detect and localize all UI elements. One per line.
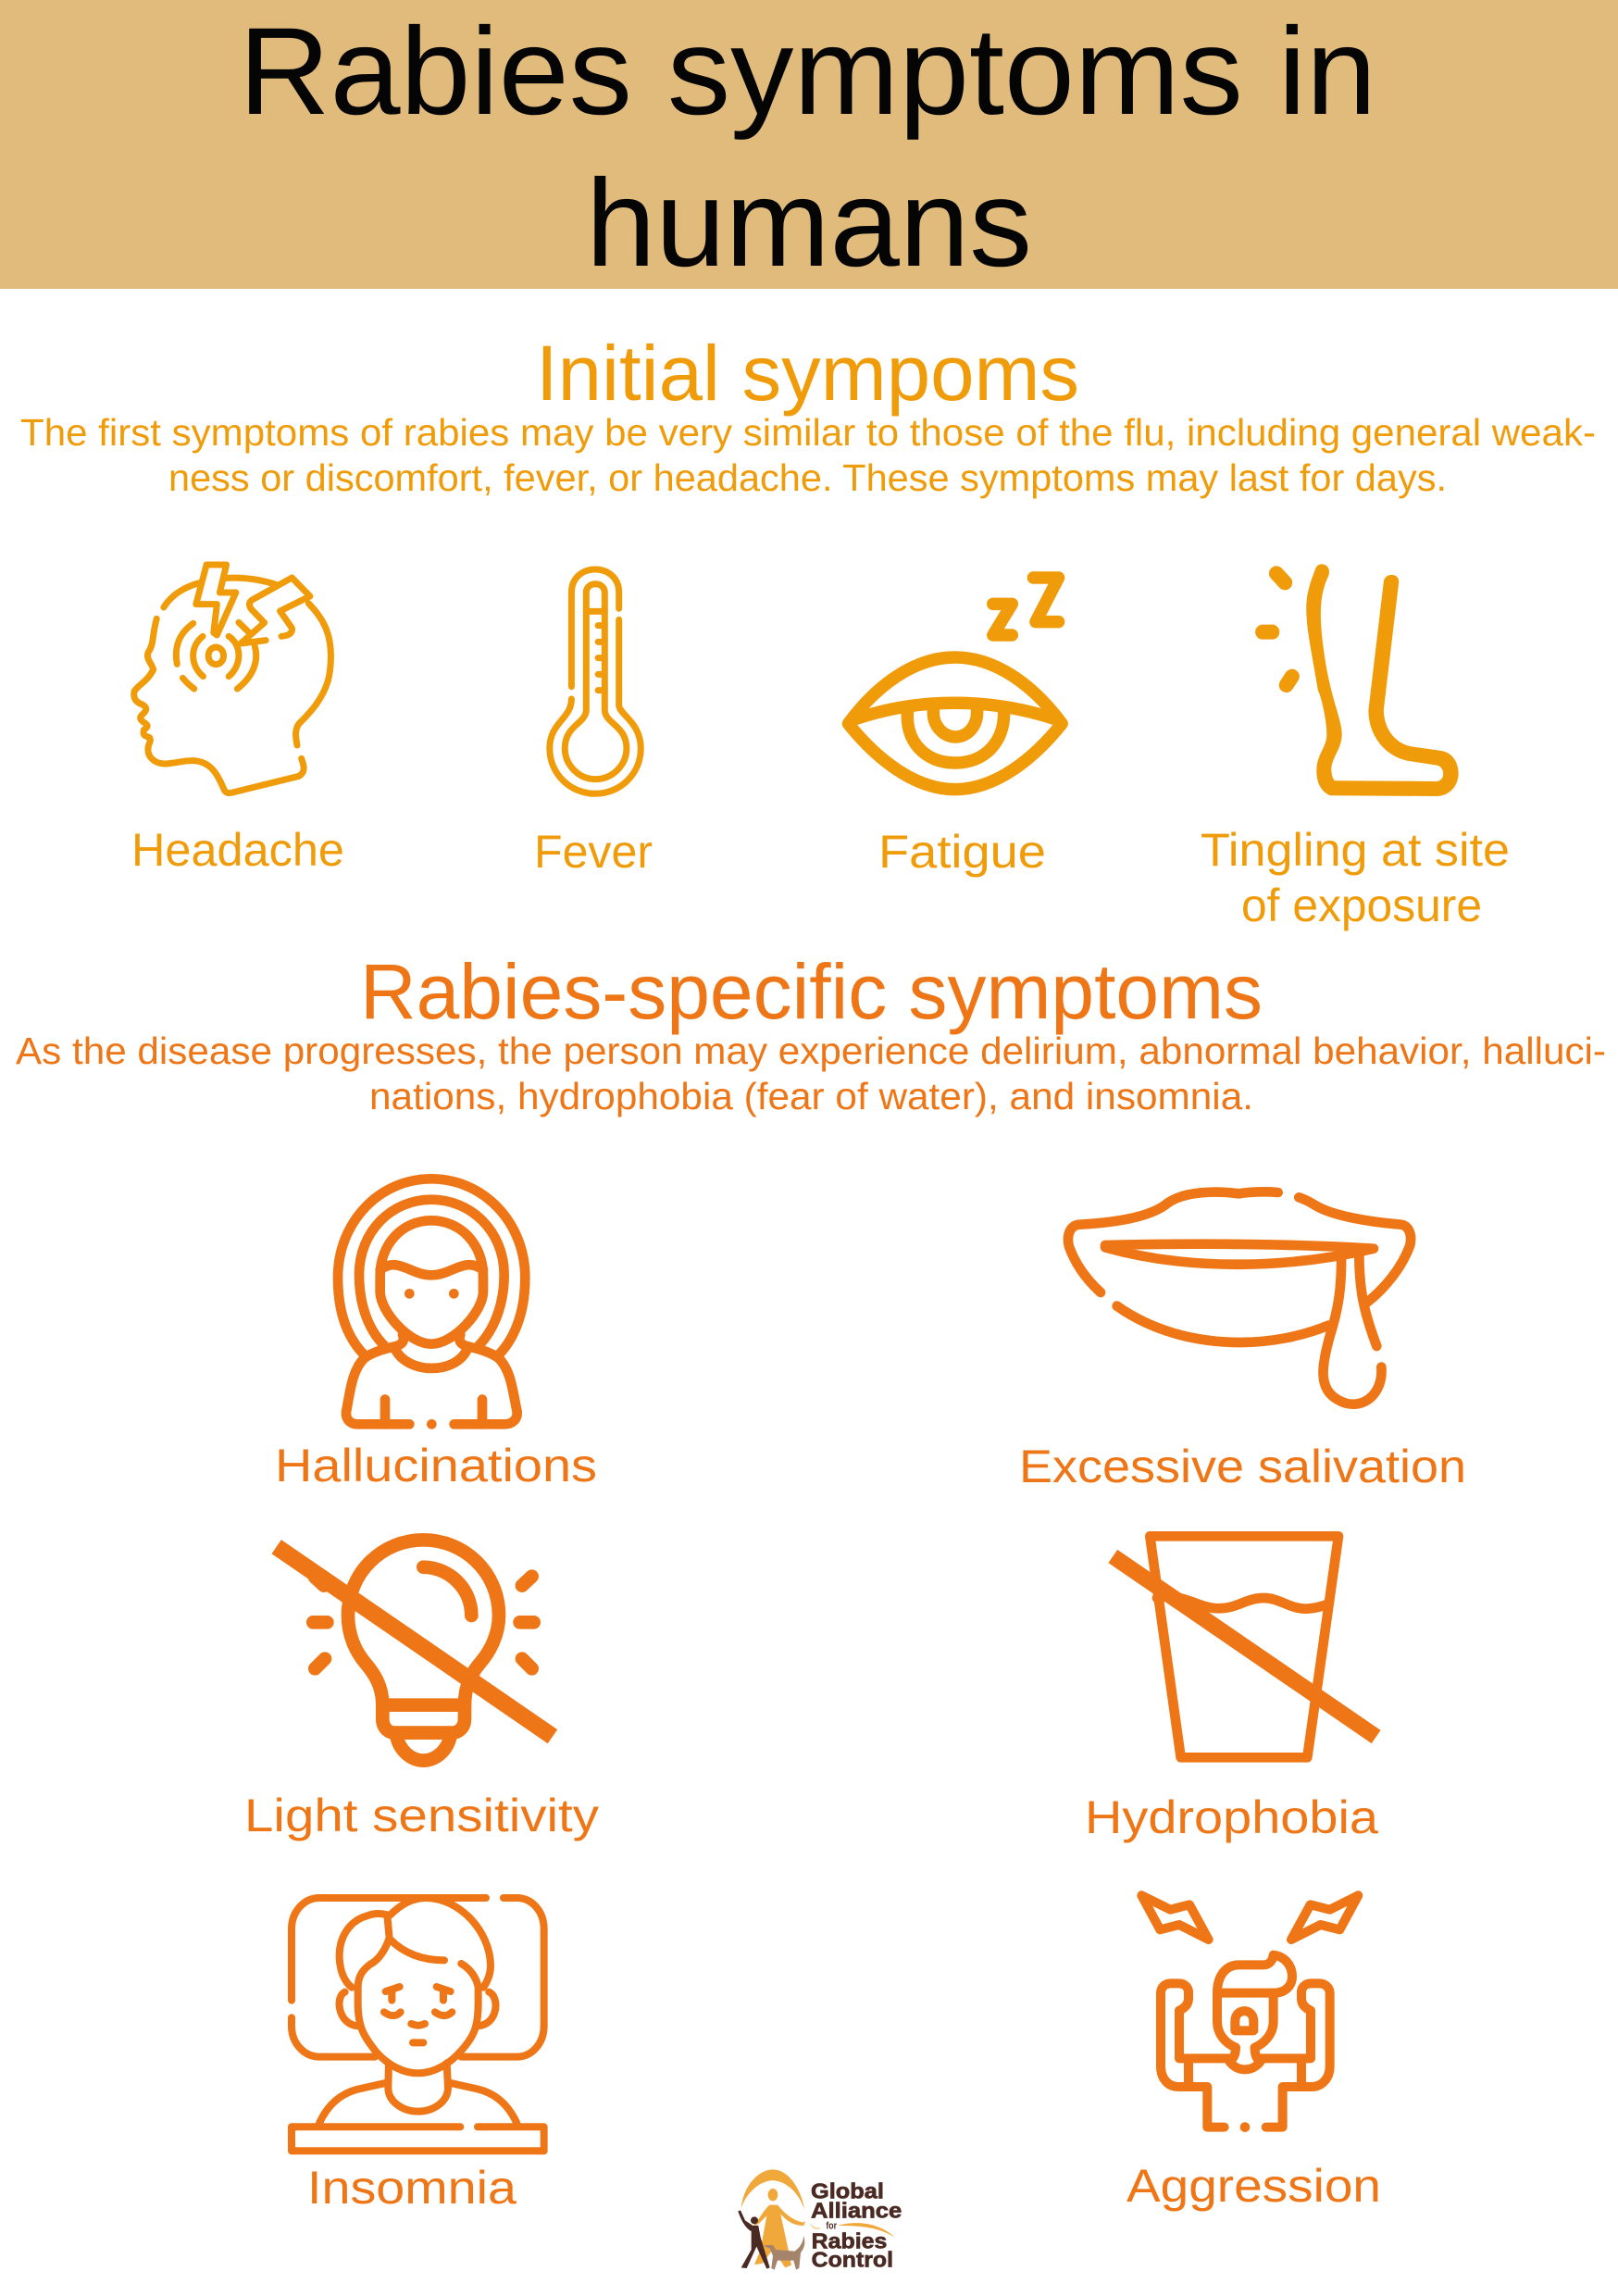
label: excessive salivation: Excessive salivation [1019,1441,1466,1492]
logo: Global Alliance for Rabies Control: for [826,2221,837,2232]
icon: excessive salivation [1068,1192,1411,1404]
label: hydrophobia: Hydrophobia [1085,1791,1378,1843]
icon: insomnia [292,1898,544,2151]
label: tingling at site of exposure [1201,824,1510,931]
text block: initial symptoms description: ness or discomfort, fever, or headache. These symptoms may last for days. [168,456,1447,499]
icon: aggression [1141,1895,1358,2132]
heading: rabies-specific symptoms: Rabies-specific symptoms [360,948,1263,1035]
label: tingling at site of exposure: of exposure [1241,880,1482,931]
text block: initial symptoms description: The first symptoms of rabies may be very similar to those of the flu, including general weak- [20,411,1596,454]
label: headache: Headache [131,824,344,876]
label: insomnia: Insomnia [307,2162,517,2214]
icon: hallucinations [338,1179,525,1429]
label: fever: Fever [534,826,653,878]
logo: Global Alliance for Rabies Control: Rabies [812,2228,887,2252]
label: light sensitivity: Light sensitivity [244,1790,599,1841]
panel: initial symptom icons [131,564,1510,931]
icon: leg with tingling [1263,564,1459,796]
logo: Global Alliance for Rabies Control: Global [811,2178,884,2202]
text block: initial symptoms description [20,411,1596,499]
title banner: humans [586,155,1032,293]
icon: thermometer [550,569,641,793]
text block: rabies-specific description: As the disease progresses, the person may experience delirium, abnormal behavior, halluci- [16,1029,1606,1072]
logo: Global Alliance for Rabies Control: Alliance [811,2199,902,2223]
label: hallucinations: Hallucinations [275,1440,597,1491]
icon: tired eye [848,578,1062,790]
heading: initial symptoms: Initial sympoms [536,330,1079,417]
label: fatigue: Fatigue [878,826,1046,878]
text block: rabies-specific description [16,1029,1606,1117]
icon: hydrophobia [1113,1536,1376,1757]
logo: Global Alliance for Rabies Control: Control [812,2247,893,2271]
label: tingling at site of exposure: Tingling at site [1201,824,1510,876]
icon: headache [134,565,330,793]
title banner: Rabies symptoms in [239,3,1376,141]
text block: rabies-specific description: nations, hydrophobia (fear of water), and insomnia. [369,1075,1253,1117]
label: aggression: Aggression [1126,2160,1381,2212]
panel: rabies-specific symptom icons [244,1179,1466,2214]
title banner [0,0,1618,293]
icon: light sensitivity [277,1540,553,1761]
logo: Global Alliance for Rabies Control [738,2169,902,2271]
